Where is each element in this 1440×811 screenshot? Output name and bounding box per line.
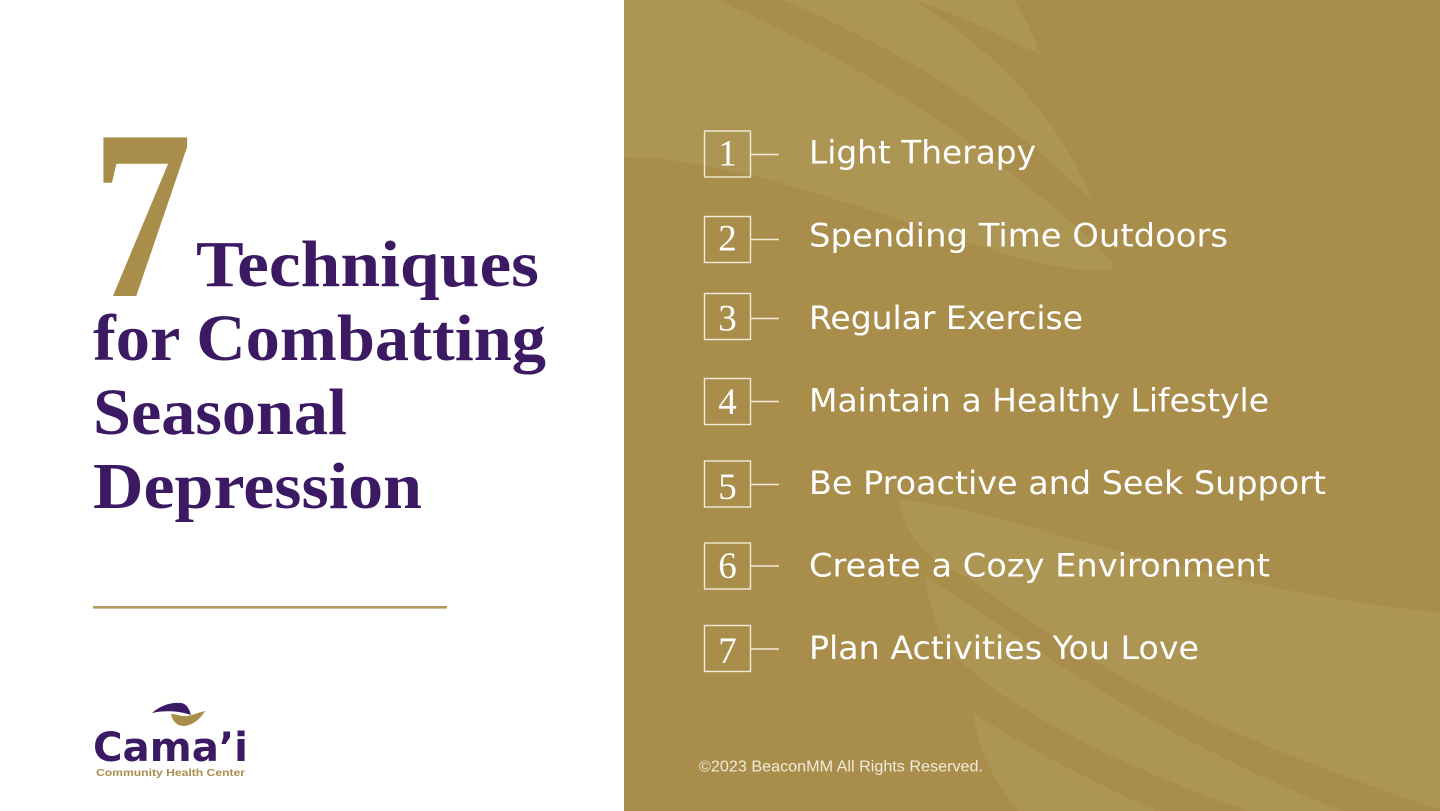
panel: right gold background [624,0,1440,811]
copyright footer: ©2023 BeaconMM All Rights Reserved. [699,758,983,776]
list item 2 [704,216,1228,262]
title: Seasonal [93,376,347,449]
title [93,228,546,523]
list item 3: Regular Exercise [809,299,1083,337]
list item 5: Be Proactive and Seek Support [809,464,1326,502]
logo: Cama'i Community Health Center: Cama’i [93,725,248,771]
list item 4 [704,378,1269,424]
list item 1: Light Therapy [809,134,1036,172]
list item 7: 7 [718,631,737,672]
title: Depression [93,450,422,523]
list item 2: 2 [718,219,737,260]
list item 6 [704,543,1270,589]
logo: Cama'i Community Health Center [93,703,248,779]
divider line [93,606,447,609]
list item 6: Create a Cozy Environment [809,546,1270,584]
list item 4: Maintain a Healthy Lifestyle [809,382,1269,420]
title: Techniques [196,228,539,301]
title: for Combatting [93,302,546,375]
list item 6: 6 [718,546,737,587]
list item 2: Spending Time Outdoors [809,216,1228,254]
list item 3 [704,294,1083,340]
list item 5: 5 [718,467,737,508]
list item 7 [704,626,1199,672]
list item 1: 1 [718,134,737,175]
list item 3: 3 [718,299,737,340]
list item 7: Plan Activities You Love [809,629,1199,667]
panel: left white background [0,0,624,811]
list item 5 [704,461,1326,508]
list item 1 [704,131,1036,177]
logo: Cama'i Community Health Center: Community Health Center [96,767,245,779]
big numeral 7: 7 [92,81,192,349]
list item 4: 4 [718,382,737,423]
